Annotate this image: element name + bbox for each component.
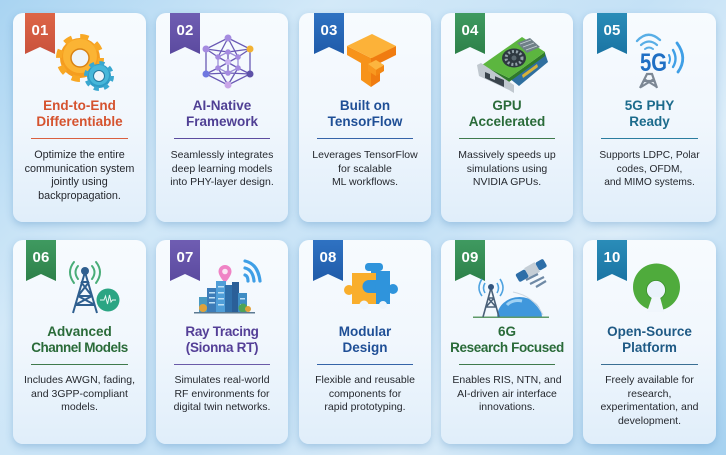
panel: card 06 advanced channel models: [13, 240, 146, 444]
body text: communication system: [25, 163, 134, 175]
heading: Framework: [186, 114, 258, 129]
badge 05: 05: [603, 22, 621, 39]
heading: 6G: [498, 324, 516, 339]
heading: Modular: [339, 324, 391, 339]
body text: Supports LDPC, Polar: [599, 150, 700, 161]
body text: into PHY-layer design.: [170, 176, 274, 188]
body text: deep learning models: [172, 163, 272, 175]
heading: 5G PHY: [625, 98, 674, 113]
panel: card 07 ray tracing: [156, 240, 288, 444]
heading: End-to-End: [43, 98, 116, 113]
body text: rapid prototyping.: [324, 401, 406, 413]
icon: antenna tower with signal badge: [69, 261, 120, 314]
badge 07: [170, 240, 200, 281]
body text: digital twin networks.: [174, 401, 270, 413]
badge 09: 09: [461, 249, 479, 266]
body text: [599, 150, 700, 188]
heading: Design: [342, 340, 388, 355]
badge 08: 08: [319, 249, 337, 266]
body text: AI-driven air interface: [457, 388, 557, 400]
badge 09: [455, 240, 485, 281]
body text: experimentation, and: [600, 401, 699, 413]
heading: AI-Native: [193, 98, 251, 113]
body text: [174, 374, 270, 413]
heading: [185, 324, 259, 355]
body text: and 3GPP-compliant: [31, 388, 128, 400]
heading: Research Focused: [450, 340, 564, 355]
body text: NVIDIA GPUs.: [473, 176, 541, 188]
body text: [25, 149, 134, 202]
badge 04: 04: [461, 22, 479, 39]
heading: (Sionna RT): [186, 340, 258, 355]
badge 10: 10: [603, 249, 621, 266]
badge 10: [597, 240, 627, 281]
heading: [31, 324, 128, 355]
heading: [607, 324, 692, 355]
body text: simulations using: [467, 163, 547, 175]
body text: jointly using: [51, 176, 108, 188]
body text: Includes AWGN, fading,: [24, 374, 135, 386]
body text: [312, 149, 418, 188]
badge 03: 03: [320, 22, 338, 39]
body text: [452, 374, 562, 413]
heading: Ray Tracing: [185, 324, 259, 339]
body text: Flexible and reusable: [315, 374, 415, 386]
body text: backpropagation.: [38, 190, 121, 202]
body text: Simulates real-world: [174, 374, 270, 386]
body text: Optimize the entire: [34, 149, 125, 161]
body text: components for: [329, 388, 401, 400]
heading: Open-Source: [607, 324, 692, 339]
heading: Advanced: [47, 324, 112, 339]
heading: Platform: [622, 340, 677, 355]
heading: Accelerated: [469, 114, 545, 129]
heading: TensorFlow: [328, 114, 402, 129]
body text: research,: [628, 388, 671, 400]
body text: innovations.: [479, 401, 535, 413]
panel: card 02 AI-native framework: [156, 13, 288, 222]
heading: [339, 324, 392, 355]
panel: card 04 GPU accelerated: [441, 13, 573, 222]
icon: gears: [56, 34, 114, 91]
badge 06: [26, 240, 56, 281]
icon: puzzle pieces: [344, 263, 398, 304]
panel: card 09 6G research focused: [441, 240, 573, 444]
heading: [186, 98, 258, 129]
body text: [600, 374, 699, 427]
body text: [24, 374, 135, 413]
body text: ML workflows.: [332, 176, 398, 188]
panel: card 05 5G PHY ready: [583, 13, 716, 222]
panel: card 08 modular design: [299, 240, 431, 444]
body text: for scalable: [338, 163, 392, 175]
body text: development.: [618, 415, 681, 427]
badge 06: 06: [32, 249, 50, 266]
badge 01: [25, 13, 55, 54]
badge 02: [170, 13, 200, 54]
heading: Channel Models: [31, 340, 128, 355]
heading: [625, 98, 674, 129]
icon: TensorFlow logo: [347, 34, 396, 87]
panel: card 03 built on TensorFlow: [299, 13, 431, 222]
badge 04: [455, 13, 485, 54]
badge 02: 02: [176, 22, 194, 39]
icon: 5G tower: [636, 34, 684, 88]
icon: city with location pin and wifi: [194, 259, 262, 314]
heading: GPU: [492, 98, 522, 113]
heading: [450, 324, 564, 355]
badge 01: 01: [31, 22, 49, 39]
badge 05: [597, 13, 627, 54]
body text: and MIMO systems.: [604, 177, 695, 188]
badge 08: [313, 240, 343, 281]
heading: [328, 98, 402, 129]
heading: Differentiable: [36, 114, 123, 129]
body text: [315, 374, 415, 413]
icon: open source logo: [633, 264, 680, 310]
body text: [458, 149, 556, 188]
heading: [36, 98, 123, 129]
heading: [469, 98, 545, 129]
body text: codes, OFDM,: [617, 164, 682, 175]
body text: Leverages TensorFlow: [312, 149, 418, 161]
icon: neural network: [202, 34, 254, 88]
icon: 5G tower: 5G: [640, 49, 667, 77]
body text: Freely available for: [605, 374, 694, 386]
badge 03: [314, 13, 344, 54]
body text: RF environments for: [174, 388, 270, 400]
heading: Ready: [629, 114, 670, 129]
icon: graphics card: [477, 37, 548, 93]
body text: models.: [61, 401, 98, 413]
body text: Massively speeds up: [458, 149, 556, 161]
body text: [170, 149, 274, 188]
body text: Enables RIS, NTN, and: [452, 374, 562, 386]
badge 07: 07: [176, 249, 194, 266]
panel: card 10 open-source platform: [583, 240, 716, 444]
heading: Built on: [340, 98, 390, 113]
body text: Seamlessly integrates: [171, 149, 273, 161]
panel: card 01 end-to-end differentiable: [13, 13, 146, 222]
icon: tower, dome and satellite: [473, 259, 549, 318]
